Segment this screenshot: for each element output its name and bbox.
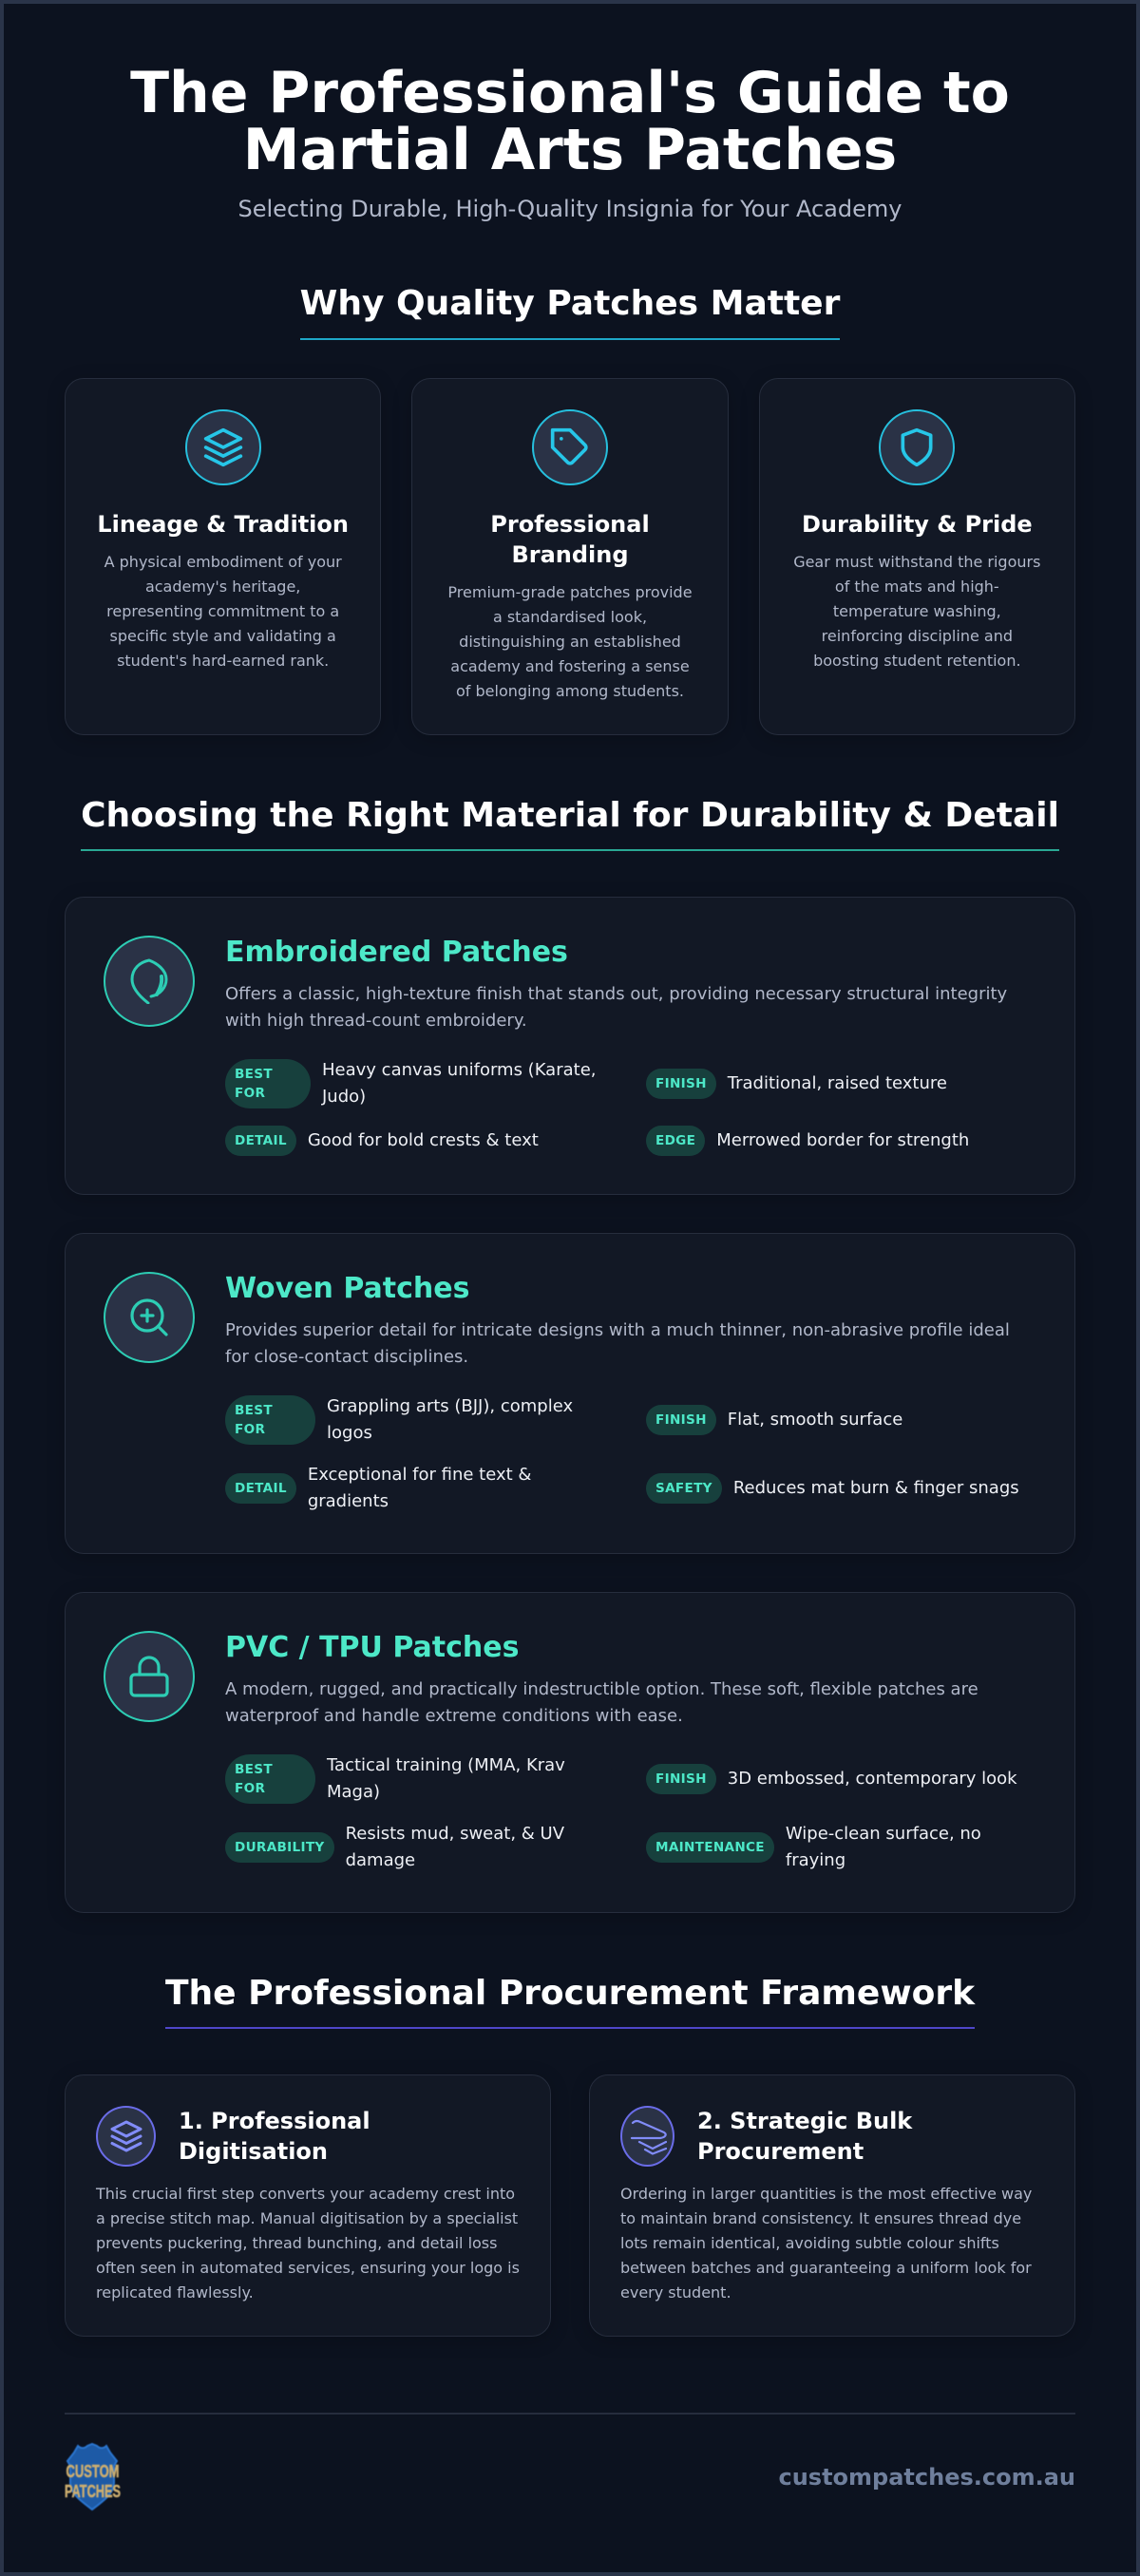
feature list: Merrowed border for strength — [716, 1130, 969, 1150]
material heading: Embroidered Patches — [225, 936, 568, 969]
card text — [447, 583, 693, 700]
card text: Premium-grade patches provide — [447, 583, 693, 601]
material description: for close-contact disciplines. — [225, 1347, 468, 1367]
footer divider — [65, 2413, 1075, 2415]
title: The Professional's Guide to — [130, 60, 1010, 126]
feature list: logos — [327, 1423, 372, 1443]
feature list: gradients — [308, 1491, 389, 1511]
heading: choosing the right material: Choosing the Right Material for Durability & Detail — [81, 796, 1059, 835]
feature list: Traditional, raised texture — [728, 1073, 947, 1093]
feature list: Judo) — [322, 1087, 366, 1107]
title: Martial Arts Patches — [243, 117, 897, 183]
feature list: Wipe-clean surface, no — [786, 1824, 981, 1844]
icon: layers — [185, 409, 261, 485]
feature list: fraying — [786, 1850, 846, 1870]
card text: a standardised look, — [493, 608, 647, 626]
feature list: BEST — [235, 1067, 273, 1082]
feature list: BEST — [235, 1403, 273, 1418]
material description: Offers a classic, high-texture finish that stands out, providing necessary structural integrity — [225, 984, 1007, 1004]
feature list: FINISH — [656, 1076, 707, 1091]
feature list: FINISH — [656, 1771, 707, 1787]
material description: waterproof and handle extreme conditions with ease. — [225, 1706, 683, 1726]
card text: student's hard-earned rank. — [117, 652, 329, 670]
logo: custom patches badge — [65, 2442, 122, 2511]
card text — [793, 553, 1040, 670]
material description: Provides superior detail for intricate designs with a much thinner, non-abrasive profile ideal — [225, 1320, 1010, 1340]
footer website: custompatches.com.au — [778, 2464, 1075, 2491]
feature list: Flat, smooth surface — [728, 1410, 902, 1430]
card text: A physical embodiment of your — [104, 553, 342, 571]
step text: to maintain brand consistency. It ensures thread dye — [620, 2209, 1021, 2227]
panel: professional branding — [411, 378, 729, 735]
feature list: FOR — [235, 1781, 265, 1796]
panel: woven patches — [65, 1233, 1075, 1554]
feature list: FINISH — [656, 1412, 707, 1428]
card text: specific style and validating a — [110, 627, 336, 645]
icon: stacked bulk layers — [620, 2106, 674, 2167]
feature list: Exceptional for fine text & — [308, 1465, 531, 1485]
card text: academy's heritage, — [145, 578, 300, 596]
card text: of belonging among students. — [456, 682, 684, 700]
step heading — [697, 2108, 913, 2165]
step text: replicated flawlessly. — [96, 2283, 254, 2301]
step text: lots remain identical, avoiding subtle colour shifts — [620, 2234, 999, 2252]
step text: every student. — [620, 2283, 732, 2301]
icon: tag — [532, 409, 608, 485]
card text: Gear must withstand the rigours — [793, 553, 1040, 571]
icon: layers — [96, 2106, 156, 2167]
step heading — [179, 2108, 370, 2165]
icon: thread loop — [104, 936, 195, 1027]
feature list: Maga) — [327, 1782, 380, 1802]
card text: distinguishing an established — [459, 633, 681, 651]
card text: boosting student retention. — [813, 652, 1021, 670]
feature list: MAINTENANCE — [656, 1840, 765, 1855]
material heading: Woven Patches — [225, 1272, 469, 1305]
icon: shield — [879, 409, 955, 485]
panel: strategic bulk procurement — [589, 2074, 1075, 2337]
card text: of the mats and high- — [835, 578, 999, 596]
feature list: Good for bold crests & text — [308, 1130, 539, 1150]
subtitle: Selecting Durable, High-Quality Insignia for Your Academy — [238, 196, 902, 222]
feature list — [225, 1754, 1017, 1870]
icon: lock — [104, 1631, 195, 1722]
panel: embroidered patches — [65, 897, 1075, 1195]
feature list: BEST — [235, 1762, 273, 1777]
title — [130, 60, 1010, 183]
feature list: 3D embossed, contemporary look — [728, 1769, 1017, 1789]
material description: with high thread-count embroidery. — [225, 1011, 527, 1031]
feature list: Reduces mat burn & finger snags — [733, 1478, 1019, 1498]
step text: often seen in automated services, ensuring your logo is — [96, 2259, 520, 2277]
card heading: Branding — [511, 541, 629, 568]
heading: why quality patches matter: Why Quality Patches Matter — [300, 284, 840, 323]
feature list: FOR — [235, 1086, 265, 1101]
feature list — [225, 1059, 969, 1156]
feature list: damage — [346, 1850, 415, 1870]
heading: procurement framework: The Professional Procurement Framework — [165, 1974, 975, 2013]
card text — [104, 553, 342, 670]
step heading: Digitisation — [179, 2138, 328, 2165]
card heading — [490, 511, 650, 568]
card text: reinforcing discipline and — [822, 627, 1013, 645]
step header — [96, 2106, 370, 2167]
feature list: Resists mud, sweat, & UV — [346, 1824, 564, 1844]
panel: professional digitisation — [65, 2074, 551, 2337]
feature list: DETAIL — [235, 1481, 287, 1496]
material description: A modern, rugged, and practically indestructible option. These soft, flexible patches are — [225, 1679, 978, 1699]
card heading: Professional — [490, 511, 650, 538]
feature list: Grappling arts (BJJ), complex — [327, 1396, 573, 1416]
panel: durability and pride — [759, 378, 1075, 735]
feature list: DURABILITY — [235, 1840, 325, 1855]
panel: lineage and tradition — [65, 378, 381, 735]
material heading: PVC / TPU Patches — [225, 1631, 519, 1664]
feature list: DETAIL — [235, 1133, 287, 1148]
icon: magnifier — [104, 1272, 195, 1363]
material description — [225, 1320, 1010, 1367]
card heading: Durability & Pride — [802, 511, 1033, 538]
step heading: 2. Strategic Bulk — [697, 2108, 912, 2134]
material description — [225, 1679, 978, 1726]
step text: Ordering in larger quantities is the most effective way — [620, 2185, 1032, 2203]
step heading: 1. Professional — [179, 2108, 370, 2134]
material details — [225, 936, 1007, 1156]
step text — [620, 2185, 1032, 2301]
material description — [225, 984, 1007, 1031]
feature list: SAFETY — [656, 1481, 712, 1496]
card text: academy and fostering a sense — [450, 657, 690, 675]
card text: representing commitment to a — [106, 602, 339, 620]
step text: prevents puckering, thread bunching, and detail loss — [96, 2234, 497, 2252]
step text: between batches and guaranteeing a uniform look for — [620, 2259, 1032, 2277]
material details — [225, 1631, 1017, 1870]
feature list: Heavy canvas uniforms (Karate, — [322, 1060, 597, 1080]
feature list — [225, 1395, 1019, 1511]
feature list: FOR — [235, 1422, 265, 1437]
step header — [620, 2106, 913, 2167]
material details — [225, 1272, 1019, 1511]
card text: temperature washing, — [833, 602, 1001, 620]
step heading: Procurement — [697, 2138, 864, 2165]
feature list: Tactical training (MMA, Krav — [327, 1755, 565, 1775]
step text: a precise stitch map. Manual digitisation by a specialist — [96, 2209, 518, 2227]
card heading: Lineage & Tradition — [97, 511, 349, 538]
step text — [95, 2185, 520, 2301]
feature list: EDGE — [656, 1133, 695, 1148]
step text: This crucial first step converts your academy crest into — [96, 2185, 515, 2203]
panel: pvc and tpu patches — [65, 1592, 1075, 1913]
